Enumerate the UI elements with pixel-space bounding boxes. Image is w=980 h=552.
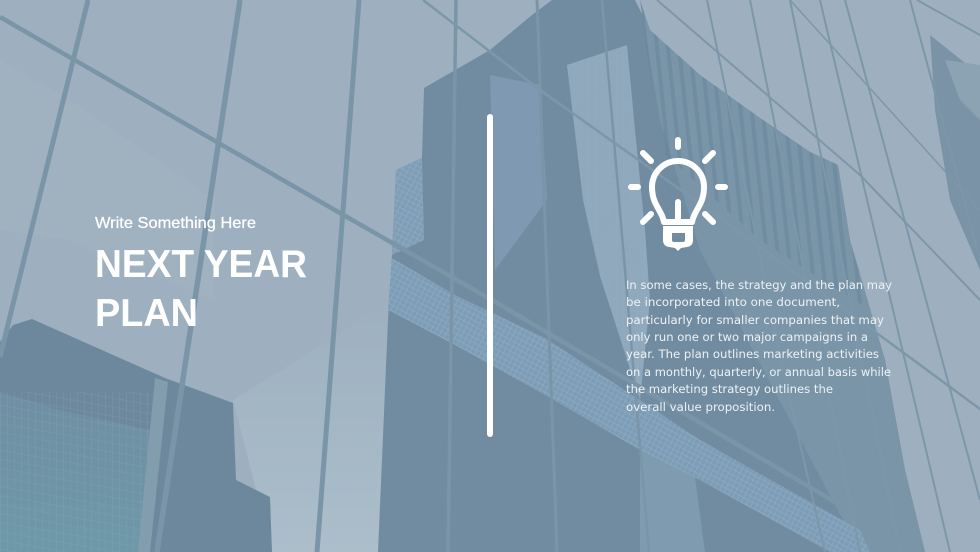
- subtitle: Write Something Here: [95, 215, 256, 232]
- body paragraph: year. The plan outlines marketing activities: [626, 347, 879, 361]
- body paragraph: particularly for smaller companies that may: [626, 313, 884, 327]
- title: NEXT YEAR: [95, 243, 307, 286]
- title: [95, 243, 307, 335]
- right distant building: [930, 35, 980, 270]
- body paragraph: the marketing strategy outlines the: [626, 382, 833, 396]
- body paragraph: [626, 278, 892, 414]
- tower lighter corner: [567, 45, 650, 400]
- title: PLAN: [95, 292, 198, 335]
- body paragraph: on a monthly, quarterly, or annual basis while: [626, 365, 891, 379]
- body paragraph: only run one or two major campaigns in a: [626, 330, 868, 344]
- body paragraph: overall value proposition.: [626, 400, 775, 414]
- central tower: [378, 0, 925, 552]
- left lower building: [0, 319, 272, 552]
- body paragraph: be incorporated into one document,: [626, 295, 840, 309]
- vertical divider: [487, 114, 493, 437]
- body paragraph: In some cases, the strategy and the plan may: [626, 278, 892, 292]
- icon: light bulb: [631, 140, 725, 251]
